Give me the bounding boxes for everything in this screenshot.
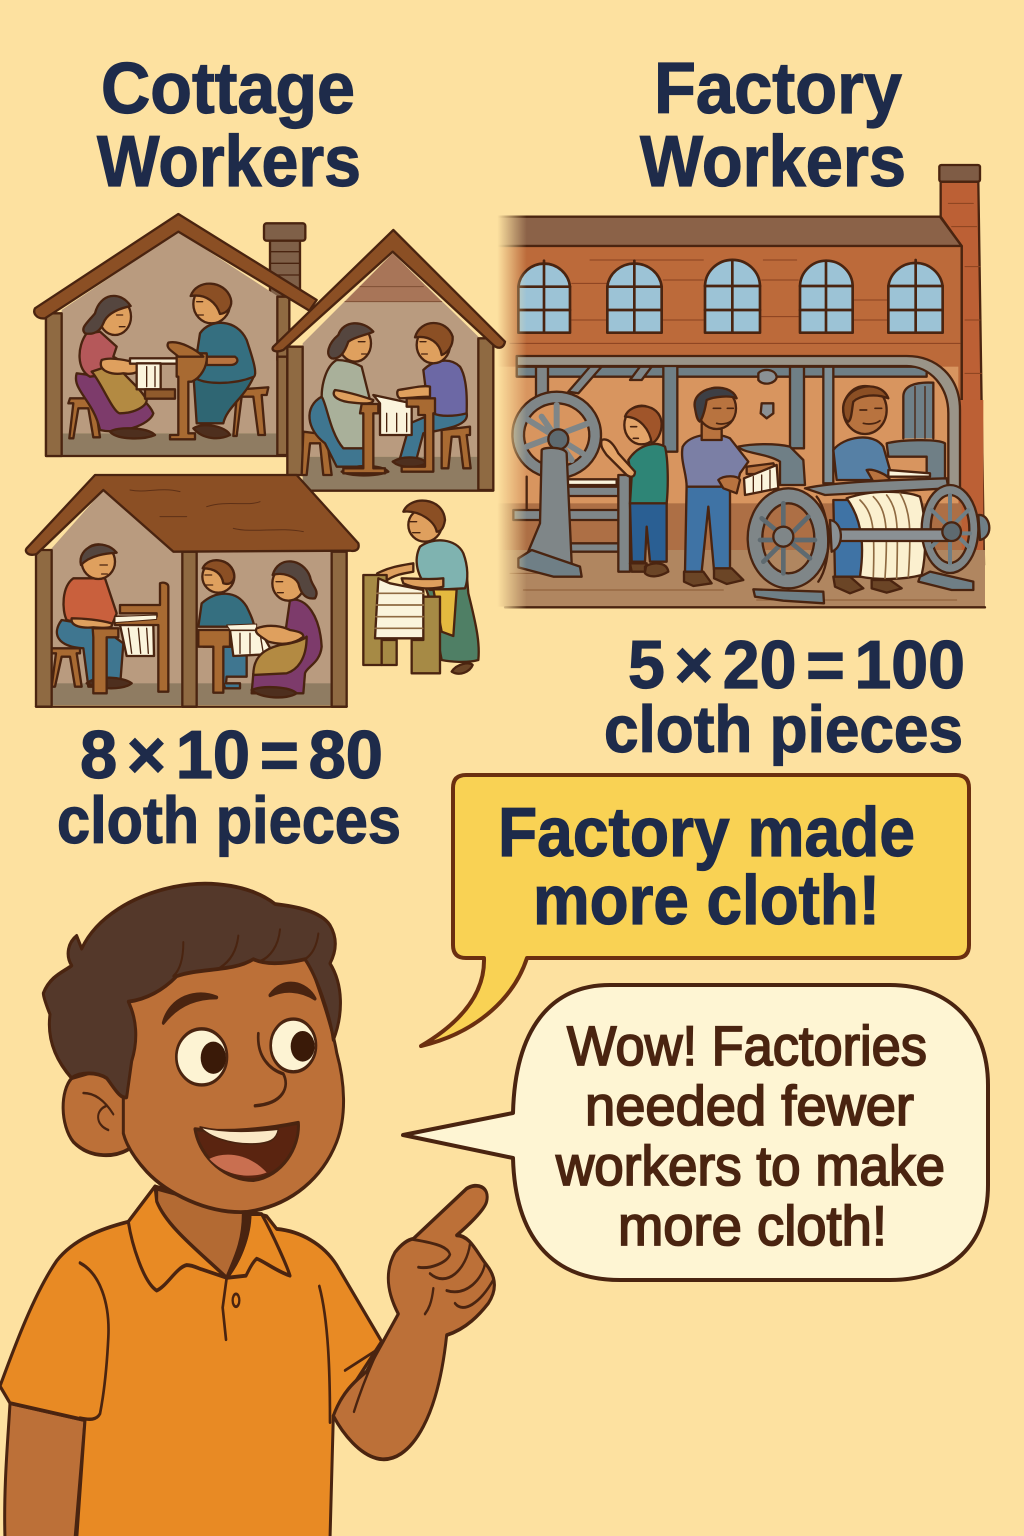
worker: boy in green shirt (601, 406, 668, 576)
house: top-left cottage (34, 214, 317, 456)
hair strands (173, 929, 318, 976)
nose (255, 1034, 286, 1106)
heading: Cottage Workers: Cottage (101, 49, 355, 129)
boy's neck (157, 1189, 250, 1278)
formula: factory total (604, 627, 965, 766)
boy's ear (63, 1061, 133, 1155)
formula: factory total: cloth pieces (604, 692, 963, 766)
heading: Factory Workers: Factory (654, 49, 902, 129)
formula: cottage total: 8 × 10 = 80 (80, 717, 383, 793)
speech bubble: boy's remark: Wow! Factories (567, 1014, 927, 1077)
callout: factory made more cloth: more cloth! (533, 861, 880, 939)
loom with cloth (93, 583, 168, 693)
icon: chimney (264, 223, 305, 297)
overhead beams and columns (517, 356, 960, 488)
windows row (518, 260, 943, 333)
machine with cloth roll (748, 485, 989, 603)
heading: Cottage Workers (97, 49, 361, 202)
worker: man seated (191, 284, 268, 438)
speech bubble: boy's remark: needed fewer (585, 1074, 914, 1137)
house: top-right cottage (273, 230, 505, 491)
factory building (493, 165, 985, 607)
spinning frame left (513, 475, 630, 572)
worker: woman seated (68, 296, 155, 438)
boy's left arm (5, 1403, 85, 1536)
worker: woman seated (252, 561, 322, 697)
boy's face (123, 944, 344, 1212)
illustration: factory building with workers and machines (490, 165, 989, 610)
worker: woman seated (302, 323, 388, 475)
loom with cloth (130, 342, 207, 439)
left edge fade (490, 213, 527, 610)
house: bottom cottage (26, 475, 359, 707)
formula: cottage total: cloth pieces (57, 783, 401, 857)
character: pointing boy (0, 884, 494, 1536)
boy's collar and placket (80, 1186, 330, 1422)
boy's hair (43, 884, 340, 1098)
boy's pointing arm and hand (333, 1186, 494, 1459)
illustration: cottage workers in three houses (26, 214, 505, 707)
eyebrows (163, 984, 315, 1023)
boy's shirt (0, 1186, 382, 1536)
heading: Factory Workers (640, 49, 906, 202)
mouth (195, 1123, 298, 1180)
callout: factory made more cloth: Factory made (498, 793, 915, 871)
heading: Factory Workers: Workers (640, 122, 906, 202)
loom with cloth (343, 395, 435, 473)
worker: man in purple shirt (682, 388, 805, 586)
speech bubble: boy's remark (403, 985, 988, 1280)
worker: man at loom (198, 560, 254, 693)
worker: woman standing at small loom outside (363, 501, 479, 674)
heading: Cottage Workers: Workers (97, 122, 361, 202)
formula: factory total: 5 × 20 = 100 (628, 627, 965, 703)
wheel left (512, 392, 601, 577)
callout: factory made more cloth (421, 775, 969, 1046)
formula: cottage total (57, 717, 401, 857)
eyes (176, 1019, 316, 1085)
loom with cloth (227, 624, 273, 656)
worker: man at machine (805, 386, 948, 593)
worker: man seated (393, 323, 471, 468)
speech bubble: boy's remark: workers to make (555, 1134, 945, 1197)
worker: woman at loom (52, 544, 132, 688)
speech bubble: boy's remark: more cloth! (618, 1194, 887, 1257)
